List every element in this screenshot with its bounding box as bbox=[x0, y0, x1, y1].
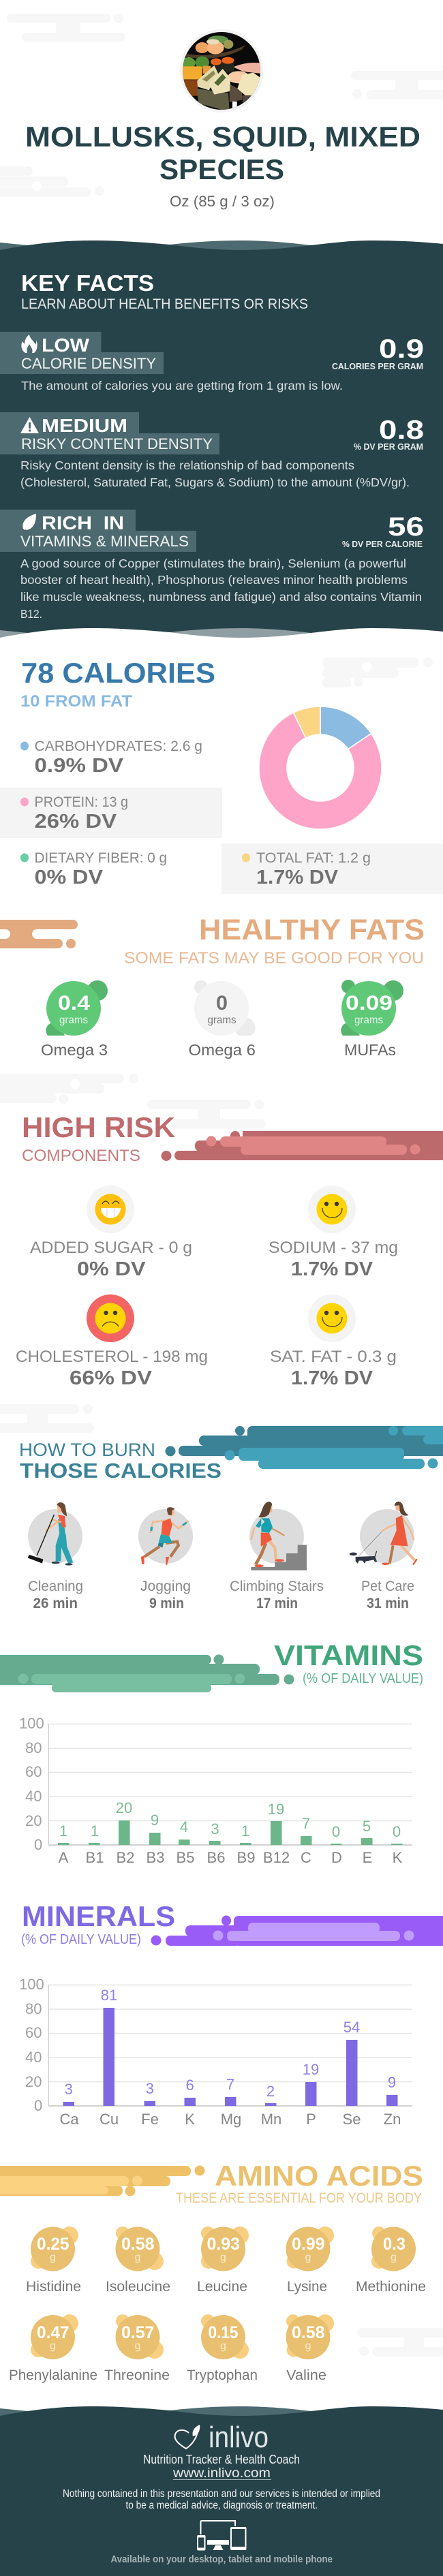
legend: protein: PROTEIN: 13 g bbox=[34, 794, 128, 810]
activity: cleaning bbox=[28, 1502, 83, 1611]
fact: low calorie density: 0.9 bbox=[379, 335, 424, 364]
legend: dietary fiber bbox=[20, 850, 167, 888]
heading: minerals: (% OF DAILY VALUE) bbox=[21, 1932, 141, 1947]
disclaimer: to be a medical advice, diagnosis or treatment. bbox=[125, 2500, 318, 2511]
fact: rich in vitamins and minerals: A good source of Copper (stimulates the brain), Selenium (a powerful bbox=[20, 557, 406, 570]
title: SPECIES bbox=[159, 153, 284, 185]
bar chart: minerals: 60 bbox=[25, 2024, 42, 2041]
bar chart: vitamins: 0 bbox=[332, 1823, 340, 1840]
activity: jogging: Jogging bbox=[140, 1579, 191, 1594]
bar chart: vitamins: B5 bbox=[177, 1849, 194, 1866]
amino acid: leucine: 0.93 bbox=[207, 2235, 240, 2254]
bar chart: minerals: 81 bbox=[101, 1987, 117, 2004]
bar chart: vitamins: 1 bbox=[59, 1822, 67, 1840]
fact: low calorie density: LOW bbox=[42, 335, 90, 356]
title: MOLLUSKS, SQUID, MIXED bbox=[25, 121, 421, 153]
bar chart: vitamins: 1 bbox=[241, 1822, 249, 1840]
heading: key facts: LEARN ABOUT HEALTH BENEFITS OR RISKS bbox=[21, 296, 308, 312]
bar chart: vitamins: 19 bbox=[268, 1801, 284, 1818]
bar chart: minerals: 3 bbox=[65, 2081, 73, 2098]
component: sodium: SODIUM - 37 mg bbox=[269, 1239, 398, 1257]
fact: medium risky content density: 0.8 bbox=[379, 416, 424, 445]
bar chart: minerals: K bbox=[185, 2111, 195, 2128]
heading: key facts: KEY FACTS bbox=[21, 270, 154, 296]
bubble: MUFAs bbox=[341, 980, 403, 1059]
bar chart: vitamins: E bbox=[363, 1849, 372, 1866]
fact: medium risky content density: MEDIUM bbox=[42, 415, 127, 436]
panel: footer bbox=[0, 2406, 443, 2576]
fact: low calorie density: The amount of calories you are getting from 1 gram is low. bbox=[21, 379, 343, 392]
availability note: Available on your desktop, tablet and mobile phone bbox=[110, 2554, 333, 2565]
bar chart: vitamins: C bbox=[301, 1849, 311, 1866]
fact: rich in vitamins and minerals: % DV PER CALORIE bbox=[342, 539, 423, 549]
bar chart: minerals: 19 bbox=[303, 2061, 319, 2078]
bar chart: vitamins: 5 bbox=[363, 1818, 371, 1835]
bar chart: vitamins: B12 bbox=[263, 1849, 290, 1866]
icon: inlivo heart logo bbox=[175, 2421, 269, 2454]
fact: low calorie density: CALORIES PER GRAM bbox=[332, 361, 423, 371]
bar chart: vitamins: B3 bbox=[147, 1849, 164, 1866]
food photo: sushi platter bbox=[179, 27, 264, 114]
legend: dietary fiber: 0% DV bbox=[34, 867, 104, 888]
amino acid: lysine: Lysine bbox=[287, 2279, 327, 2295]
activity: cleaning: Cleaning bbox=[28, 1579, 83, 1594]
icon: inlivo heart logo: inlivo bbox=[209, 2421, 269, 2454]
amino acid: valine bbox=[286, 2314, 334, 2383]
amino acid: histidine: 0.25 bbox=[37, 2235, 70, 2254]
heading: amino acids bbox=[0, 2160, 423, 2206]
bar chart: vitamins: B1 bbox=[86, 1849, 104, 1866]
bar chart: minerals: Mn bbox=[261, 2111, 281, 2128]
amino acid: valine: 0.58 bbox=[292, 2323, 325, 2342]
bar chart: minerals: 0 bbox=[34, 2097, 42, 2114]
disclaimer bbox=[63, 2488, 380, 2511]
fact: low calorie density: CALORIE DENSITY bbox=[21, 355, 156, 372]
bar chart: minerals: 40 bbox=[25, 2049, 42, 2066]
activity: pet care: 31 min bbox=[367, 1596, 409, 1611]
component: cholesterol: CHOLESTEROL - 198 mg bbox=[16, 1348, 208, 1366]
fact: low calorie density bbox=[0, 332, 424, 392]
legend: carbohydrates: CARBOHYDRATES: 2.6 g bbox=[34, 739, 202, 754]
bar chart: minerals: Cu bbox=[100, 2111, 119, 2128]
bar chart: vitamins bbox=[19, 1715, 412, 1866]
serving size subtitle: Oz (85 g / 3 oz) bbox=[170, 193, 275, 210]
bubble: omega 3: 0.4 bbox=[58, 992, 90, 1014]
fact: rich in vitamins and minerals: booster of heart health), Phosphorus (releaves minor health problems bbox=[20, 573, 408, 587]
legend: carbohydrates bbox=[20, 739, 202, 777]
component: saturated fat bbox=[270, 1294, 397, 1389]
amino acid: isoleucine: 0.58 bbox=[121, 2235, 155, 2254]
heading: calories: 78 CALORIES bbox=[21, 657, 215, 689]
heading: vitamins bbox=[0, 1639, 423, 1692]
bar chart: minerals: 6 bbox=[185, 2077, 194, 2094]
heading: minerals bbox=[21, 1900, 443, 1947]
amino acid: leucine: Leucine bbox=[197, 2279, 247, 2295]
bubble: omega 6 bbox=[188, 980, 256, 1059]
bar chart: vitamins: B9 bbox=[237, 1849, 255, 1866]
bubble: omega 3 bbox=[41, 980, 108, 1059]
fact: rich in vitamins and minerals: RICH IN bbox=[42, 512, 124, 533]
amino acid: phenylalanine bbox=[9, 2314, 97, 2383]
bubble: MUFAs: MUFAs bbox=[344, 1041, 396, 1059]
amino acid: methionine: Methionine bbox=[356, 2279, 426, 2295]
bar chart: vitamins: 0 bbox=[393, 1823, 401, 1840]
fact: rich in vitamins and minerals: 56 bbox=[388, 512, 424, 542]
legend: protein bbox=[0, 788, 222, 838]
heading: how to burn those calories: HOW TO BURN bbox=[19, 1440, 155, 1460]
bar chart: vitamins: 80 bbox=[25, 1739, 42, 1756]
activity: jogging bbox=[138, 1507, 193, 1611]
fact: medium risky content density: (Cholesterol, Saturated Fat, Sugars & Sodium) to the amount (%DV/gr). bbox=[20, 476, 410, 489]
fact: rich in vitamins and minerals: like muscle weakness, numbness and fatigue) and also contains Vitamin bbox=[20, 590, 422, 604]
bar chart: vitamins: 40 bbox=[25, 1788, 42, 1805]
amino acid: methionine: 0.3 bbox=[383, 2235, 406, 2254]
amino acid: tryptophan: 0.15 bbox=[209, 2323, 239, 2342]
bar chart: vitamins: 100 bbox=[19, 1715, 44, 1732]
bar chart: vitamins: 9 bbox=[151, 1812, 159, 1829]
heading: high risk components: COMPONENTS bbox=[22, 1147, 140, 1165]
bubble: omega 3: Omega 3 bbox=[41, 1041, 108, 1059]
amino acid: lysine: g bbox=[305, 2252, 311, 2263]
bar chart: vitamins: B2 bbox=[117, 1849, 134, 1866]
legend: carbohydrates: 0.9% DV bbox=[34, 755, 124, 777]
legend: total fat: TOTAL FAT: 1.2 g bbox=[256, 850, 371, 866]
fact: medium risky content density: RISKY CONTENT DENSITY bbox=[21, 435, 213, 452]
amino acid: threonine: g bbox=[135, 2340, 140, 2352]
legend: total fat bbox=[222, 843, 443, 894]
amino acid: valine: Valine bbox=[286, 2368, 326, 2383]
legend: dietary fiber: DIETARY FIBER: 0 g bbox=[34, 850, 167, 866]
component: saturated fat: 1.7% DV bbox=[291, 1367, 373, 1389]
activity: climbing stairs: 17 min bbox=[256, 1596, 298, 1611]
component: added sugar bbox=[30, 1185, 192, 1280]
amino acid: threonine: 0.57 bbox=[121, 2323, 154, 2342]
component: added sugar: 0% DV bbox=[77, 1258, 146, 1280]
activity: cleaning: 26 min bbox=[33, 1596, 78, 1611]
activity: climbing stairs bbox=[230, 1502, 324, 1611]
bubble: omega 6: Omega 6 bbox=[188, 1041, 256, 1059]
component: added sugar: ADDED SUGAR - 0 g bbox=[30, 1239, 192, 1257]
bar chart: minerals: 9 bbox=[388, 2074, 396, 2091]
bar chart: minerals bbox=[19, 1976, 412, 2128]
bar chart: vitamins: 20 bbox=[116, 1799, 132, 1816]
fact: medium risky content density bbox=[0, 412, 424, 489]
bar chart: minerals: Zn bbox=[384, 2111, 401, 2128]
bar chart: minerals: 54 bbox=[343, 2019, 360, 2036]
component: saturated fat: SAT. FAT - 0.3 g bbox=[270, 1348, 397, 1366]
bar chart: vitamins: 0 bbox=[34, 1836, 42, 1853]
title bbox=[25, 121, 421, 185]
heading: amino acids: AMINO ACIDS bbox=[215, 2160, 423, 2192]
bar chart: minerals: P bbox=[306, 2111, 316, 2128]
amino acid: histidine: Histidine bbox=[26, 2279, 81, 2295]
component: cholesterol: 66% DV bbox=[70, 1367, 153, 1389]
legend: protein: 26% DV bbox=[34, 811, 117, 833]
heading: vitamins: (% OF DAILY VALUE) bbox=[303, 1671, 423, 1686]
bar chart: vitamins: A bbox=[59, 1849, 69, 1866]
bar chart: minerals: 100 bbox=[19, 1976, 44, 1993]
amino acid: tryptophan: g bbox=[220, 2340, 226, 2352]
activity: pet care bbox=[350, 1502, 417, 1611]
fact: medium risky content density: Risky Content density is the relationship of bad components bbox=[20, 459, 354, 472]
amino acid: leucine: g bbox=[220, 2252, 226, 2263]
amino acid: tryptophan: Tryptophan bbox=[187, 2368, 258, 2383]
activity: jogging: 9 min bbox=[149, 1596, 184, 1611]
bar chart: vitamins: 7 bbox=[302, 1815, 310, 1832]
bar chart: minerals: 7 bbox=[226, 2076, 234, 2093]
tagline: Nutrition Tracker & Health Coach bbox=[143, 2453, 300, 2466]
bar chart: vitamins: K bbox=[393, 1849, 403, 1866]
bar chart: minerals: Ca bbox=[60, 2111, 79, 2128]
bar chart: vitamins: D bbox=[331, 1849, 342, 1866]
heading: healthy fats: SOME FATS MAY BE GOOD FOR YOU bbox=[124, 949, 424, 967]
amino acid: leucine bbox=[197, 2226, 249, 2295]
bar chart: minerals: 80 bbox=[25, 2000, 42, 2017]
panel: key facts bbox=[0, 240, 443, 647]
component: sodium: 1.7% DV bbox=[291, 1258, 373, 1280]
activity: pet care: Pet Care bbox=[361, 1579, 414, 1594]
heading: calories bbox=[20, 657, 215, 711]
amino acid: phenylalanine: 0.47 bbox=[37, 2323, 70, 2342]
bubble: MUFAs: 0.09 bbox=[346, 992, 393, 1014]
heading: healthy fats: HEALTHY FATS bbox=[199, 914, 425, 946]
heading: high risk components bbox=[22, 1111, 443, 1165]
bubble: omega 6: grams bbox=[207, 1014, 236, 1026]
bar chart: minerals: Mg bbox=[221, 2111, 241, 2128]
heading: healthy fats bbox=[0, 914, 425, 967]
donut chart: calorie breakdown bbox=[259, 707, 382, 829]
activity: climbing stairs: Climbing Stairs bbox=[230, 1579, 324, 1594]
bar chart: vitamins: 20 bbox=[25, 1812, 42, 1829]
amino acid: isoleucine bbox=[106, 2226, 170, 2295]
bar chart: minerals: Se bbox=[343, 2111, 361, 2128]
bar chart: minerals: 3 bbox=[146, 2080, 154, 2097]
fact: rich in vitamins and minerals: VITAMINS & MINERALS bbox=[20, 533, 189, 550]
bubble: MUFAs: grams bbox=[354, 1014, 383, 1026]
icon: desktop, tablet and phone bbox=[197, 2521, 247, 2551]
amino acid: valine: g bbox=[305, 2340, 311, 2352]
amino acid: methionine: g bbox=[391, 2252, 397, 2263]
amino acid: lysine: 0.99 bbox=[292, 2235, 324, 2254]
component: sodium bbox=[269, 1185, 398, 1280]
bar chart: vitamins: 4 bbox=[180, 1818, 188, 1835]
bar chart: vitamins: B6 bbox=[207, 1849, 225, 1866]
bubble: omega 6: 0 bbox=[216, 992, 228, 1014]
heading: how to burn those calories bbox=[19, 1426, 443, 1483]
heading: key facts bbox=[21, 270, 308, 312]
amino acid: isoleucine: Isoleucine bbox=[106, 2279, 170, 2295]
amino acid: tryptophan bbox=[187, 2314, 258, 2383]
fact: medium risky content density: % DV PER GRAM bbox=[354, 441, 423, 452]
amino acid: lysine bbox=[286, 2226, 334, 2295]
bar chart: minerals: 20 bbox=[25, 2073, 42, 2090]
heading: minerals: MINERALS bbox=[22, 1900, 175, 1932]
fact: rich in vitamins and minerals: B12. bbox=[20, 607, 42, 621]
heading: how to burn those calories: THOSE CALORIES bbox=[20, 1459, 222, 1483]
component: cholesterol bbox=[16, 1294, 208, 1389]
amino acid: phenylalanine: Phenylalanine bbox=[9, 2368, 97, 2383]
amino acid: histidine: g bbox=[50, 2252, 56, 2263]
legend: total fat: 1.7% DV bbox=[256, 867, 339, 888]
heading: vitamins: VITAMINS bbox=[274, 1639, 423, 1671]
heading: calories: 10 FROM FAT bbox=[20, 692, 132, 711]
disclaimer: Nothing contained in this presentation and our services is intended or implied bbox=[63, 2488, 380, 2500]
heading: high risk components: HIGH RISK bbox=[22, 1111, 175, 1143]
website link: www.inlivo.com bbox=[172, 2466, 271, 2481]
amino acid: phenylalanine: g bbox=[50, 2340, 56, 2352]
bubble: omega 3: grams bbox=[59, 1014, 88, 1026]
fact: rich in vitamins and minerals bbox=[0, 510, 424, 621]
amino acid: histidine bbox=[26, 2226, 81, 2295]
amino acid: isoleucine: g bbox=[135, 2252, 140, 2263]
amino acid: threonine: Threonine bbox=[104, 2368, 170, 2383]
amino acid: methionine bbox=[356, 2226, 426, 2295]
bar chart: minerals: Fe bbox=[141, 2111, 159, 2128]
bar chart: vitamins: 60 bbox=[25, 1763, 42, 1780]
bar chart: vitamins: 1 bbox=[91, 1822, 99, 1840]
amino acid: threonine bbox=[104, 2314, 170, 2383]
bar chart: minerals: 2 bbox=[266, 2083, 275, 2100]
bar chart: vitamins: 3 bbox=[211, 1820, 219, 1837]
